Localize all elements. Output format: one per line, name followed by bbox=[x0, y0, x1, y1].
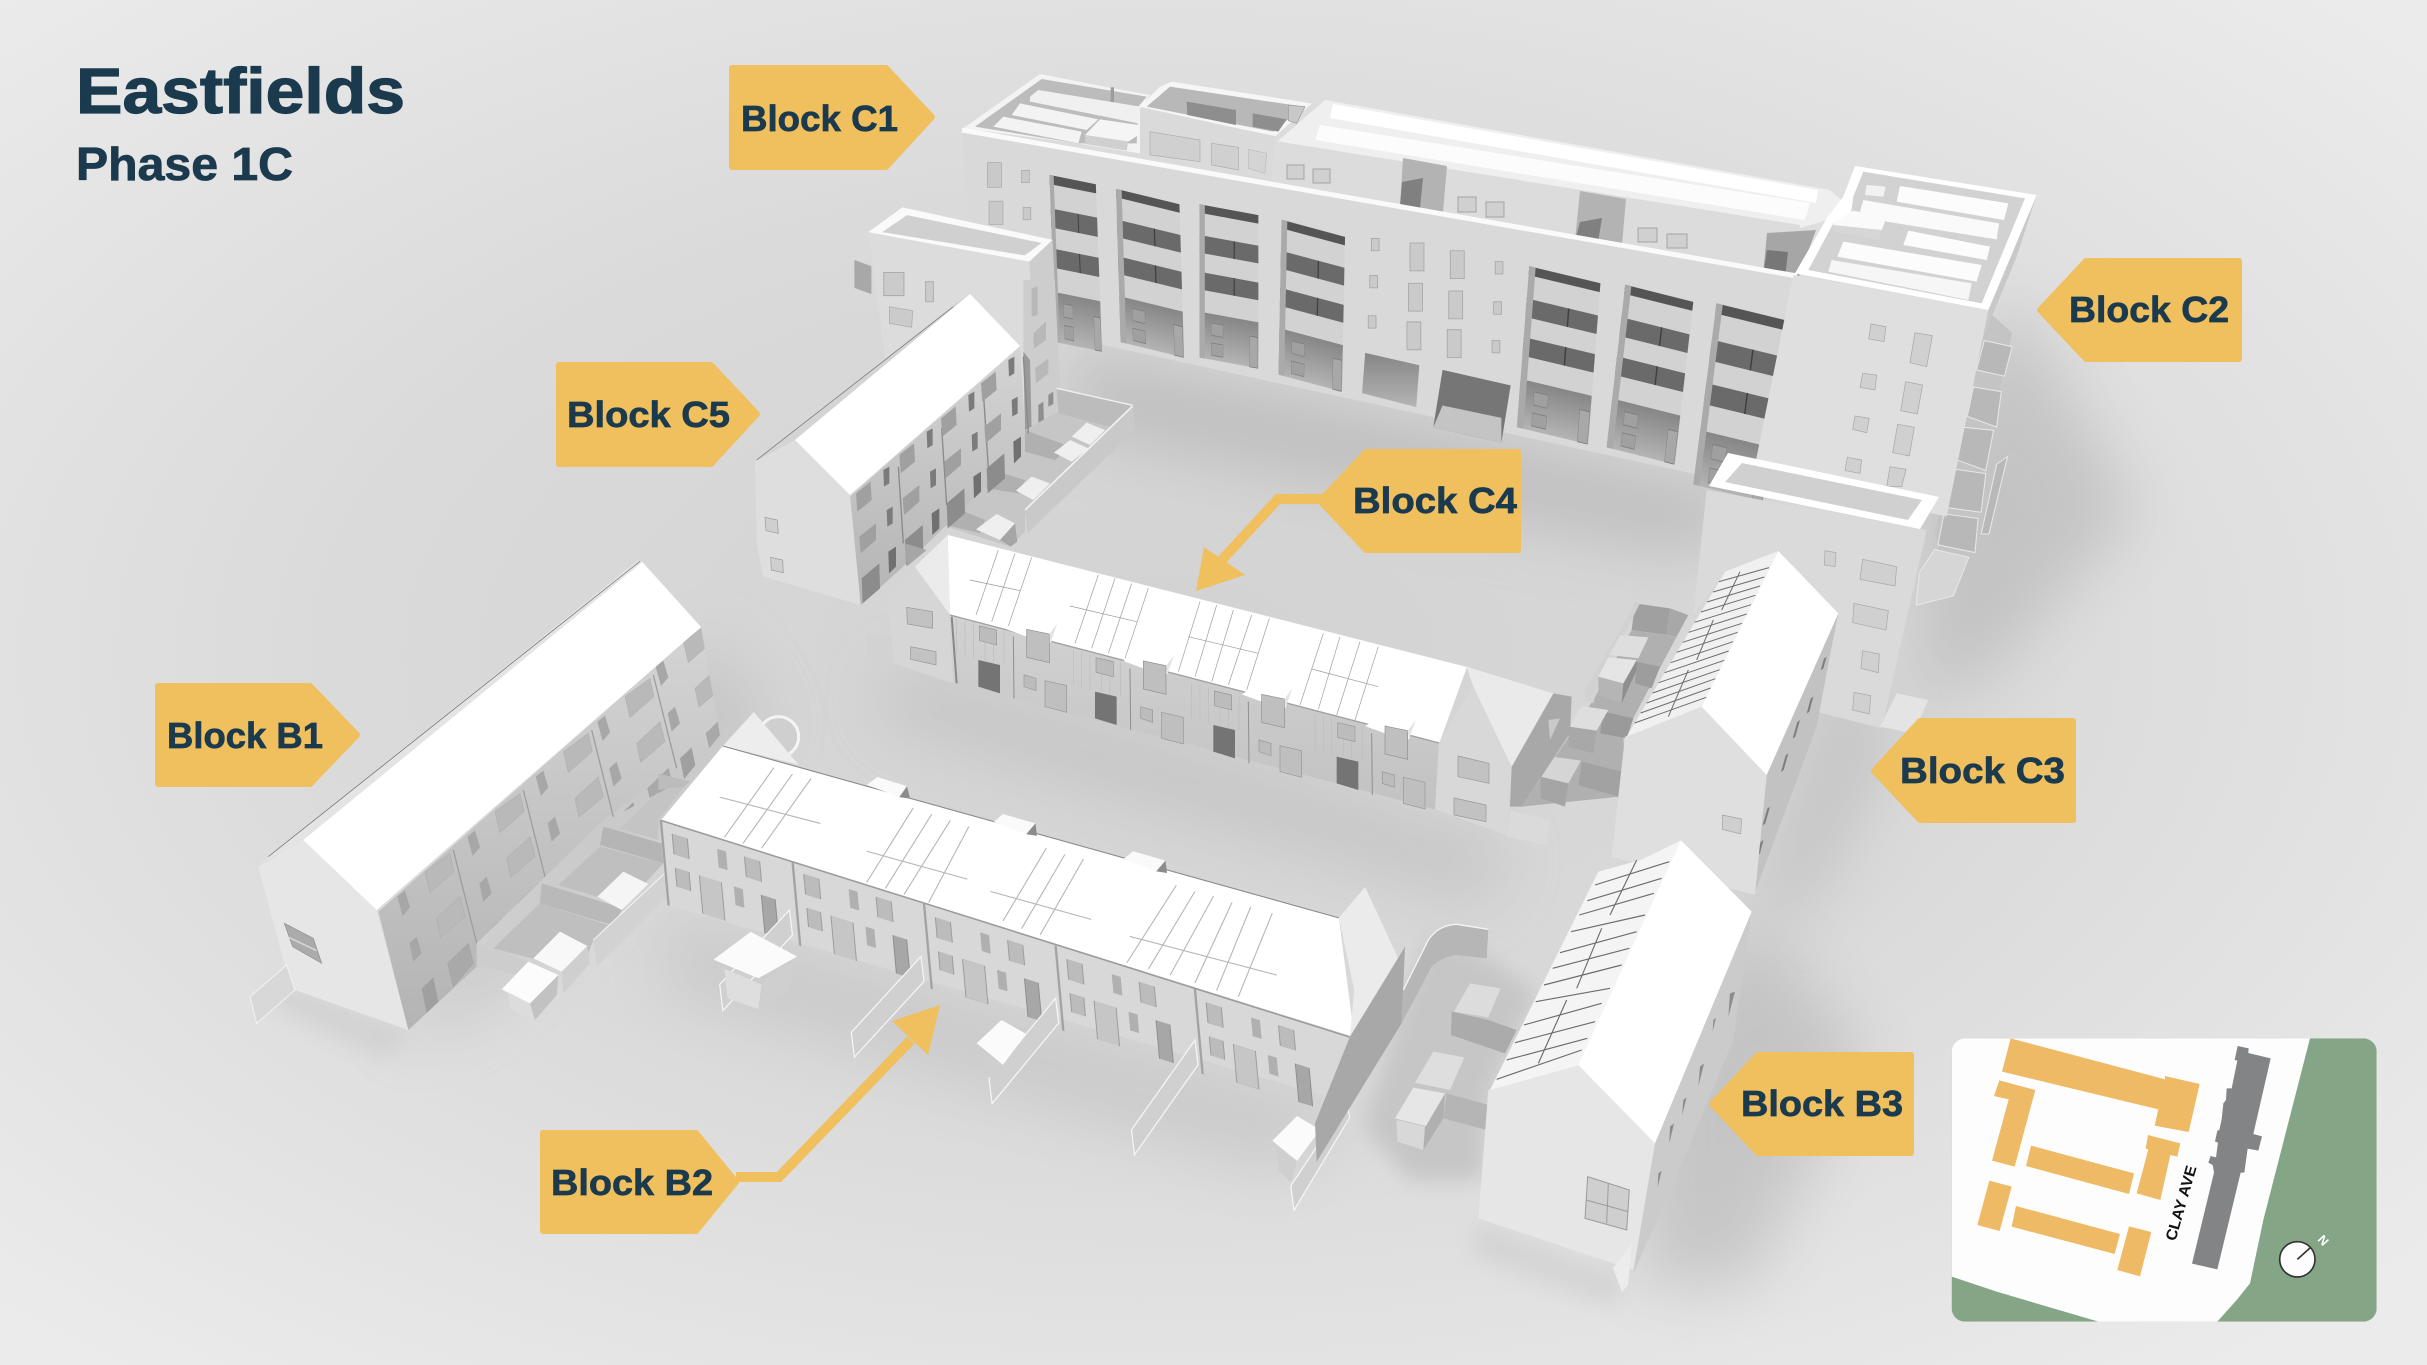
B3 roof bbox=[1490, 840, 1681, 1090]
C1 left roof and court box bbox=[963, 74, 1312, 177]
label: Block B2: Block B2 bbox=[551, 1162, 713, 1203]
label: Block B2 bbox=[543, 1133, 736, 1231]
label: Block C3: Block C3 bbox=[1900, 750, 2065, 791]
arrow: Block B2 bbox=[736, 1005, 940, 1177]
C4 roof bbox=[948, 535, 1467, 743]
C3 roof bbox=[1627, 551, 1778, 737]
C1 upper roof strips bbox=[1270, 100, 1855, 228]
label: Block C3 bbox=[1874, 721, 2073, 820]
C2 end wall bbox=[1753, 275, 1988, 517]
buildings: Block C3 tower and C3 bbox=[1522, 453, 1939, 897]
central windows and archway bbox=[1362, 238, 1511, 443]
C2 side wall and balconies bbox=[1916, 310, 2012, 605]
C2 upper side wall bbox=[1977, 195, 2037, 353]
C3 garden bbox=[1522, 602, 1688, 807]
C4 right end bbox=[1435, 667, 1572, 845]
C2 windows bbox=[1845, 324, 1932, 487]
roof terrace bbox=[963, 74, 1150, 153]
B3 garden floor bbox=[1363, 933, 1537, 1180]
map: north compass: N bbox=[2315, 1232, 2331, 1249]
left wall windows bbox=[987, 163, 1031, 224]
label: Block C5: Block C5 bbox=[567, 394, 730, 435]
B3 right wall bbox=[1633, 912, 1752, 1273]
B3 gable bbox=[1478, 1065, 1655, 1270]
building: Block B1 bbox=[250, 560, 735, 1030]
label: Block C1: Block C1 bbox=[741, 98, 898, 139]
building: Block C1 bbox=[962, 74, 1855, 501]
label: Block C1 bbox=[732, 68, 932, 167]
B3 solar panels bbox=[1497, 860, 1669, 1079]
inset site map bbox=[1952, 1038, 2377, 1322]
C3 tower roof bbox=[1709, 453, 1939, 529]
arrow: Block C4 bbox=[1196, 499, 1322, 591]
B1 roof bbox=[258, 560, 642, 865]
label: Block C2: Block C2 bbox=[2069, 289, 2229, 330]
map: north compass bbox=[2280, 1232, 2331, 1277]
B3 bins bbox=[1395, 983, 1517, 1150]
title: Eastfields bbox=[76, 55, 405, 127]
label: Block C2 bbox=[2040, 261, 2239, 359]
label: Block C5 bbox=[559, 365, 757, 464]
map: site ground bbox=[1952, 1038, 2310, 1322]
B2 left gable bbox=[723, 712, 799, 765]
C2 roof terrace bbox=[1795, 166, 2037, 310]
subtitle: Phase 1C bbox=[76, 138, 293, 190]
B2 side wall bbox=[1315, 947, 1405, 1162]
label: Block B1 bbox=[158, 686, 357, 784]
B1 gardens bbox=[477, 773, 690, 977]
B1 gable bbox=[258, 840, 408, 1030]
building: Block C2 bbox=[1753, 166, 2037, 605]
C3 right wall bbox=[1753, 613, 1838, 897]
B2 wall bbox=[661, 820, 1350, 1102]
C1 recessed bays and windows bbox=[987, 163, 1786, 501]
building: Block C5 bbox=[755, 294, 1028, 605]
C3 gable end bbox=[1612, 707, 1767, 895]
C4 left gable bbox=[888, 567, 953, 683]
C4 front wall bbox=[950, 615, 1439, 809]
label: Block B3: Block B3 bbox=[1741, 1083, 1903, 1124]
label: Block C4 bbox=[1320, 452, 1518, 550]
map: neighbouring building bbox=[2192, 1046, 2271, 1269]
map: building footprints bbox=[1977, 1038, 2200, 1276]
B2 fence walls bbox=[720, 910, 1350, 1210]
B2 chimneys bbox=[867, 777, 1167, 873]
building: Block B2 bbox=[661, 712, 1402, 1210]
B3 garden end wall bbox=[1613, 1243, 1632, 1292]
B1 long wall bbox=[378, 627, 720, 1030]
B1 stub wall bbox=[250, 965, 295, 1023]
building: Block B3 with garden bbox=[1315, 840, 1752, 1273]
curved wall bbox=[1402, 924, 1488, 1023]
recessed balcony bays bbox=[1049, 175, 1786, 501]
B2 right gable bbox=[1339, 887, 1402, 1037]
C3 solar panels bbox=[1635, 568, 1769, 723]
block C5 garden bbox=[947, 388, 1135, 547]
B2 back curved wall bbox=[758, 717, 799, 757]
map: street name: CLAY AVE bbox=[2163, 1164, 2200, 1243]
building: Block C4 bbox=[866, 535, 1572, 845]
B1 bins bbox=[502, 872, 648, 1020]
C1 upper storey wall bbox=[1270, 141, 1816, 282]
C3 tower bbox=[1693, 490, 1928, 733]
C4 dormers bbox=[1007, 619, 1416, 759]
ground shadows bbox=[271, 294, 2136, 1308]
label: Block C4: Block C4 bbox=[1353, 480, 1517, 521]
B2 roof bbox=[661, 746, 1354, 1037]
C4 roof panels bbox=[970, 550, 1378, 720]
B2 bins bbox=[714, 932, 1320, 1183]
building: Block C5 tower bbox=[854, 207, 1060, 432]
C1 main facade bbox=[962, 130, 1797, 490]
label: Block B3 bbox=[1712, 1055, 1911, 1153]
map: green space bbox=[1952, 1038, 2377, 1322]
court box bbox=[1140, 82, 1312, 177]
label: Block B1: Block B1 bbox=[167, 715, 323, 756]
